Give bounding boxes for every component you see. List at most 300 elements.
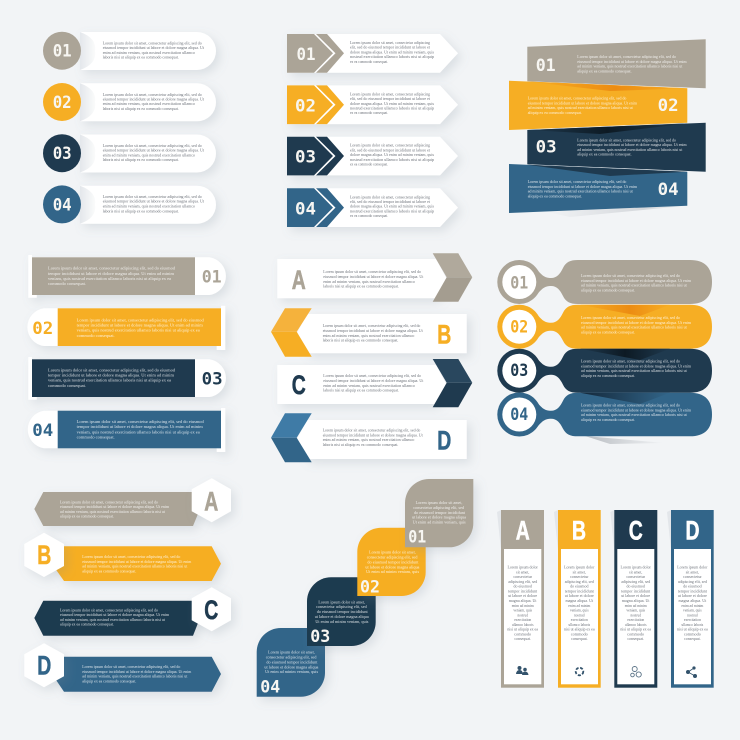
row 04 [43,185,216,224]
text block: ad minim veniam, quis nostrud exercitation ullamco laboris nisi ut [82,674,188,680]
text block: commodo consequat. [48,281,86,286]
panel: numbered arrows [287,34,458,227]
panel: vertical columns [497,510,714,688]
text block: do eiusmod [514,584,532,589]
letter: C [292,370,306,400]
number: 01 [510,273,528,293]
number: 03 [536,138,557,158]
text block: adipiscing elit, sed [508,579,537,585]
text block: Lorem ipsum dolor [508,565,538,570]
text block: do eiusmod tempor incididunt [367,559,419,564]
text block [620,565,651,641]
text block: nostrud [517,612,528,617]
text block: ullamco laboris [625,622,647,627]
text block: aliquip ex ea commodo consequat. [577,68,632,73]
text block: do eiusmod [570,584,588,589]
text block: sit amet, [629,569,642,575]
text block: Lorem ipsum dolor sit amet, consectetur adipiscing [350,91,430,97]
text block: Lorem ipsum dolor sit amet, consectetur adipiscing elit, sed do [581,359,680,365]
text block [103,143,205,162]
text block: Lorem ipsum dolor sit amet, consectetur adipiscing elit, sed do [577,137,676,143]
text block: commodo [514,631,531,636]
text block: magna aliqua. Ut [509,598,537,603]
text block: eiusmod tempor incididunt ut labore et dolore magna aliqua. Ut enim [581,278,692,283]
text block: consectetur adipiscing elit, sed [413,505,464,511]
text block [315,599,369,625]
row 03 [43,134,216,172]
text block: ad minim veniam, quis nostrud exercitation ullamco laboris nisi ut [581,283,688,289]
text block: Lorem ipsum dolor [621,565,651,570]
panel: lettered chevrons [271,253,472,462]
text block: enim ad minim veniam, quis nostrud exercitation ullamco [103,50,195,56]
text block [60,607,170,627]
text block: Lorem ipsum dolor sit amet, [318,599,365,605]
text block: nostrud [687,612,698,617]
text block: ut labore et dolore magna aliqua [315,614,369,619]
letter: C [629,515,643,545]
text block: consequat. [684,636,701,641]
text block [581,359,692,378]
number: 02 [295,96,316,116]
text block [365,550,420,575]
text block: enim ad minim veniam, quis nostrud exercitation ullamco [103,203,195,209]
text block: ad minim veniam, quis nostrud exercitation ullamco laboris nisi ut [60,509,166,515]
text block: eiusmod tempor incididunt ut labore et dolore magna aliqua. Ut [103,148,205,152]
text block: laboris nisi ut aliquip ex ea commodo consequat. [103,106,179,111]
icon: circles [631,666,641,677]
number: 03 [510,361,528,381]
text block: consectetur adipiscing elit, sed [367,554,417,560]
text block: ad minim veniam, quis nostrud exercitation ullamco laboris nisi ut [60,617,166,623]
text block: eiusmod tempor incididunt ut labore et dolore magna aliqua. Ut enim [581,363,692,368]
text block: aliquip ex ea commodo consequat. [577,152,632,157]
text block: enim ad minim veniam, quis nostrud exercitation ullamco [323,333,414,339]
text block: Lorem ipsum dolor sit amet, consectetur adipiscing elit, sed do [60,607,158,613]
text block [528,96,638,115]
text block: eiusmod tempor incididunt ut labore et dolore magna aliqua. Ut [103,96,205,101]
panel: staircase leaves [257,479,473,698]
text block: veniam, quis nostrud exercitation ullamco laboris nisi ut aliquip ex ea [77,328,200,334]
bar 02 [27,306,225,350]
text block [581,315,692,334]
number: 04 [510,405,528,425]
number: 01 [202,267,222,287]
text block: Lorem ipsum dolor [564,565,595,570]
text block: consequat. [627,636,644,641]
row 01 [497,260,712,304]
number: 02 [32,319,53,339]
text block: consequat. [571,636,588,641]
text block: Lorem ipsum dolor sit amet, consectetur adipiscing elit, sed do [528,96,626,102]
column B [554,510,601,688]
text block [350,91,434,115]
text block: aliquip ex ea commodo consequat. [60,622,114,627]
text block: enim ad minim veniam, quis nostrud exercitation ullamco [323,437,414,443]
text block: Lorem ipsum dolor sit amet, consectetur adipiscing elit, sed do [103,92,202,98]
text block: ex ea commodo consequat. [350,110,388,115]
letter: B [37,540,51,570]
letter: D [437,425,451,455]
text block: exercitation [627,617,644,622]
text block: enim ad minim veniam, quis nostrud exercitation ullamco [103,101,195,107]
text block [412,500,466,526]
text block: dolore magna aliqua. Ut enim ad minim veniam, quis [350,49,434,55]
text block: Lorem ipsum dolor sit amet, consectetur adipiscing elit, sed do eiusmod [48,266,175,272]
text block: adipiscing elit, sed [621,579,650,585]
panel: ring connectors [497,260,712,444]
text block: ex ea commodo consequat. [350,59,388,64]
banner D [24,643,221,692]
letter: D [37,650,51,680]
text block: nostrud exercitation ullamco laboris nisi ut aliquip [350,157,434,162]
text block: magna aliqua. Ut [622,598,650,603]
text block: laboris nisi ut aliquip ex ea commodo consequat. [323,388,399,393]
icon: people [516,666,528,675]
text block: commodo [627,631,644,636]
text block [103,92,205,111]
text block: Ut enim ad minim veniam, quis [413,520,466,526]
text block: tempor incididunt [621,588,651,593]
text block: veniam, quis nostrud exercitation ullamco laboris nisi ut aliquip ex ea [48,276,171,282]
text block: enim ad minim [512,603,535,608]
leaf 01 [405,479,473,548]
text block: Lorem ipsum dolor sit amet, consectetur adipiscing elit, sed do [323,428,420,434]
text block: aliquip ex ea commodo consequat. [60,514,114,519]
letter: A [292,265,306,295]
text block: eiusmod tempor incididunt ut labore et dolore magna aliqua. Ut enim [528,100,638,105]
text block: eiusmod tempor incididunt ut labore et dolore magna aliqua. Ut enim [82,559,192,564]
text block: consectetur adipiscing elit, sed [266,654,316,660]
number: 04 [260,678,280,698]
text block: laboris nisi ut aliquip ex ea commodo consequat. [103,208,179,213]
text block: nisi ut aliquip ex ea [564,627,595,632]
text block: eiusmod tempor incididunt ut labore et dolore magna aliqua. Ut [103,199,205,204]
text block: Lorem ipsum dolor sit amet, consectetur adipiscing elit, sed do [103,143,202,149]
text block [577,54,687,73]
text block: Lorem ipsum dolor sit amet, consectetur adipiscing elit, sed do [581,315,680,321]
text block: ut labore et dolore [565,593,594,598]
text block: ut labore et dolore magna aliqua [264,664,319,669]
text block: Lorem ipsum dolor sit amet, consectetur adipiscing elit, sed do [82,664,180,670]
text block: eiusmod tempor incididunt ut labore et dolore magna aliqua. Ut enim [528,184,638,189]
text block: commodo [684,631,701,636]
text block: eiusmod tempor incididunt ut labore et dolore magna aliqua. Ut [323,432,424,437]
row 04 [287,188,458,227]
text block: Lorem ipsum dolor sit amet, consectetur adipiscing elit, sed do [581,403,680,409]
text block: eiusmod tempor incididunt ut labore et dolore magna aliqua. Ut [103,45,205,50]
number: 02 [53,93,72,113]
text block: do eiusmod [683,584,702,589]
bar 04 [28,408,225,452]
text block: adipiscing elit, sed [565,579,594,585]
text block: veniam, quis [626,608,645,614]
banner B [24,533,221,581]
text block: Lorem ipsum dolor sit amet, consectetur adipiscing elit, sed do eiusmod [77,419,204,425]
text block: Lorem ipsum dolor sit amet, consectetur adipiscing elit, sed do [581,273,680,279]
text block [577,137,687,157]
text block: veniam, quis [513,608,532,614]
text block: commodo consequat. [48,383,86,388]
letter: B [572,515,586,545]
leaf 03 [307,577,376,647]
bar 01 [28,255,226,298]
text block: ex ea commodo consequat. [350,161,388,166]
banner C [34,587,231,636]
text block [82,554,192,573]
text block: enim ad minim [568,603,591,608]
ribbon 02 [509,81,687,130]
text block: tempor incididunt ut labore et dolore magna aliqua. Ut enim ad minim [77,424,204,429]
row 02 [43,83,216,121]
number: 03 [310,627,330,647]
ribbon 03 [527,123,706,172]
text block: eiusmod tempor incididunt ut labore et dolore magna aliqua. Ut [323,378,424,383]
number: 04 [53,195,72,215]
text block: eiusmod tempor incididunt ut labore et dolore magna aliqua. Ut enim [581,407,692,412]
text block: laboris nisi ut aliquip ex ea commodo consequat. [323,338,398,343]
text block: ad minim veniam, quis nostrud exercitation ullamco laboris nisi ut [581,325,688,331]
text block: eiusmod tempor incididunt ut labore et dolore magna aliqua. Ut [323,328,424,333]
text block: Lorem ipsum dolor sit amet, consectetur adipiscing elit, sed do [103,40,202,46]
panel: numbered pills [43,32,216,224]
number: 04 [295,199,316,219]
text block: ut labore et dolore [621,593,650,598]
panel: hexagon banners [24,478,231,692]
text block: adipiscing elit, sed [678,579,707,585]
text block: consequat. [514,636,531,641]
text block: consectetur [626,574,646,579]
row 01 [287,34,458,73]
text block: tempor incididunt [565,588,595,593]
text block: enim ad minim [681,603,704,608]
row 02 [497,305,712,349]
text block: Lorem ipsum dolor sit amet, consectetur adipiscing elit, sed do [60,499,158,505]
number: 03 [295,148,316,168]
text block [77,317,204,338]
text block: laboris nisi ut aliquip ex ea commodo consequat. [323,442,398,447]
text block [677,565,708,641]
row C [277,359,472,407]
number: 01 [53,42,72,62]
number: 04 [658,180,679,200]
text block: nostrud exercitation ullamco laboris nisi ut aliquip [350,106,434,110]
row D [271,413,467,462]
text block [564,565,595,641]
text block [323,428,424,447]
text block: aliquip ex ea commodo consequat. [82,678,136,683]
text block: commodo consequat. [77,333,115,338]
number: 01 [296,45,316,65]
text block: tempor incididunt ut labore et dolore magna aliqua. Ut enim ad minim [48,271,175,276]
text block: nostrud exercitation ullamco laboris nisi ut aliquip [350,54,434,59]
text block [77,419,204,440]
text block: enim ad minim [625,603,648,608]
text block: laboris nisi ut aliquip ex ea commodo consequat. [103,157,179,162]
text block: veniam, quis [570,608,589,614]
text block: ullamco laboris [682,622,704,627]
text block: laboris nisi ut aliquip ex ea commodo consequat. [103,55,179,60]
text block [581,403,692,422]
text block: tempor incididunt ut labore et dolore magna aliqua. Ut enim ad minim [48,372,175,378]
text block: nostrud [630,612,641,617]
banner A [34,478,231,526]
text block: ad minim veniam, quis nostrud exercitation ullamco laboris nisi ut [577,147,683,153]
row 03 [497,349,712,393]
text block: ex ea commodo consequat. [350,213,388,218]
text block: Lorem ipsum dolor sit amet, [416,500,462,506]
text block: consectetur adipiscing elit, sed [316,604,367,610]
text block: ad minim veniam, quis nostrud exercitation ullamco laboris nisi ut [581,412,688,418]
text block: tempor incididunt [678,588,708,593]
number: 03 [202,369,223,389]
text block: do eiusmod [627,584,645,589]
text block: Lorem ipsum dolor [677,565,708,570]
text block [60,499,170,519]
text block: nostrud exercitation ullamco laboris nisi ut aliquip [350,208,434,213]
text block [528,179,638,198]
text block: Lorem ipsum dolor sit amet, [268,650,315,656]
text block: veniam, quis nostrud exercitation ullamco laboris nisi ut aliquip ex ea [48,378,171,384]
text block: nisi ut aliquip ex ea [507,627,538,632]
icon: share [686,667,697,678]
number: 02 [360,577,380,597]
text block: exercitation [684,617,701,622]
row A [277,253,472,302]
row 02 [287,85,458,124]
text block: ad minim veniam, quis nostrud exercitation ullamco laboris nisi ut [577,64,683,70]
text block: do eiusmod tempor incididunt [414,510,466,515]
text block: eiusmod tempor incididunt ut labore et dolore magna aliqua. Ut enim [577,142,687,147]
leaf 02 [357,528,426,597]
text block [82,664,192,683]
text block [48,266,175,286]
text block: Lorem ipsum dolor sit amet, consectetur adipiscing [350,194,430,200]
column D [667,510,714,688]
text block: aliquip ex ea commodo consequat. [581,417,635,422]
letter: A [516,515,530,545]
text block: enim ad minim veniam, quis nostrud exercitation ullamco [323,279,415,285]
text block: Lorem ipsum dolor sit amet, consectetur adipiscing elit, sed do [577,54,676,60]
text block: consectetur [683,574,702,579]
bar 03 [28,357,226,400]
number: 02 [658,96,679,116]
number: 03 [53,144,72,164]
text block: sit amet, [686,569,699,575]
text block: Lorem ipsum dolor sit amet, consectetur adipiscing elit, sed do eiusmod [48,367,175,373]
text block: Lorem ipsum dolor sit amet, consectetur adipiscing [350,40,430,46]
text block: eiusmod tempor incididunt ut labore et dolore magna aliqua. Ut enim [577,59,687,64]
text block: Ut enim ad minim veniam, quis [265,669,319,675]
text block: elit, sed do eiusmod tempor incididunt ut labore et [350,96,431,102]
text block: do eiusmod tempor incididunt [317,609,369,614]
row 04 [497,392,712,444]
text block: ut labore et dolore magna aliqua [365,564,420,569]
ribbon 04 [509,164,687,217]
text block: Lorem ipsum dolor sit amet, consectetur adipiscing elit, sed do eiusmod [77,317,204,323]
text block [507,565,538,641]
text block: consectetur [570,574,589,579]
text block: dolore magna aliqua. Ut enim ad minim veniam, quis [350,152,434,158]
letter: D [686,515,700,545]
text block: ad minim veniam, quis nostrud exercitation ullamco laboris nisi ut [528,189,634,195]
number: 01 [536,56,556,76]
text block: laboris nisi ut aliquip ex ea commodo consequat. [323,284,399,289]
text block: commodo consequat. [77,435,115,440]
text block: eiusmod tempor incididunt ut labore et dolore magna aliqua. Ut enim [60,504,170,509]
leaf 04 [257,628,325,698]
text block: Lorem ipsum dolor sit amet, consectetur adipiscing elit, sed do [323,269,421,275]
text block: aliquip ex ea commodo consequat. [82,568,136,573]
text block: ullamco laboris [568,622,591,627]
text block: do eiusmod tempor incididunt [266,659,318,664]
text block: eiusmod tempor incididunt ut labore et dolore magna aliqua. Ut [323,274,424,279]
text block: Lorem ipsum dolor sit amet, consectetur adipiscing elit, sed do [528,179,626,185]
text block [323,269,424,289]
text block: nisi ut aliquip ex ea [620,627,651,632]
text block: Lorem ipsum dolor sit amet, consectetur adipiscing elit, sed do [103,194,202,200]
text block: Lorem ipsum dolor sit amet, consectetur adipiscing elit, sed do [82,554,180,560]
text block: elit, sed do eiusmod tempor incididunt ut labore et [350,45,431,51]
column A [497,510,544,688]
text block: Ut enim ad minim veniam, quis [315,619,369,625]
text block: ut labore et dolore magna aliqua [412,515,466,520]
text block: aliquip ex ea commodo consequat. [528,110,582,115]
text block: tempor incididunt [508,588,538,593]
text block [323,373,424,393]
text block: sit amet, [516,569,529,575]
text block: enim ad minim veniam, quis nostrud exercitation ullamco [103,152,195,158]
text block [48,367,175,388]
text block: Lorem ipsum dolor sit amet, consectetur adipiscing elit, sed do [323,323,420,329]
row 03 [287,137,458,175]
text block: ad minim veniam, quis nostrud exercitation ullamco laboris nisi ut [82,564,188,570]
number: 04 [32,421,53,441]
text block [264,650,319,675]
number: 01 [408,528,426,548]
text block [350,40,434,64]
text block: Ut enim ad minim veniam, quis [366,569,420,575]
text block: ad minim veniam, quis nostrud exercitation ullamco laboris nisi ut [581,368,688,374]
icon: globe [576,668,583,675]
row 01 [43,32,216,70]
text block: ad minim veniam, quis nostrud exercitation ullamco laboris nisi ut [528,105,634,111]
text block: elit, sed do eiusmod tempor incididunt ut labore et [350,147,431,153]
text block: Lorem ipsum dolor sit amet, consectetur adipiscing elit, sed do [323,373,421,379]
panel: tabbed bars [27,255,226,452]
text block: magna aliqua. Ut [565,598,594,603]
text block: magna aliqua. Ut [679,598,707,603]
letter: B [437,319,451,349]
text block: consectetur [513,574,533,579]
letter: A [204,487,218,517]
row B [271,308,467,357]
text block: veniam, quis [683,608,702,614]
text block: ut labore et dolore [678,593,707,598]
text block [323,323,424,343]
text block: ut labore et dolore [508,593,537,598]
text block: veniam, quis nostrud exercitation ullamco laboris nisi ut aliquip ex ea [77,429,200,435]
panel: slanted ribbons [509,39,706,217]
text block: aliquip ex ea commodo consequat. [581,329,635,334]
text block: eiusmod tempor incididunt ut labore et dolore magna aliqua. Ut enim [581,320,692,325]
number: 02 [510,317,528,337]
column C [610,510,657,688]
text block: Lorem ipsum dolor sit amet, consectetur adipiscing [350,143,430,149]
text block: commodo [571,631,588,636]
text block: dolore magna aliqua. Ut enim ad minim veniam, quis [350,101,434,107]
text block: eiusmod tempor incididunt ut labore et dolore magna aliqua. Ut enim [82,669,192,674]
text block: elit, sed do eiusmod tempor incididunt ut labore et [350,199,431,205]
